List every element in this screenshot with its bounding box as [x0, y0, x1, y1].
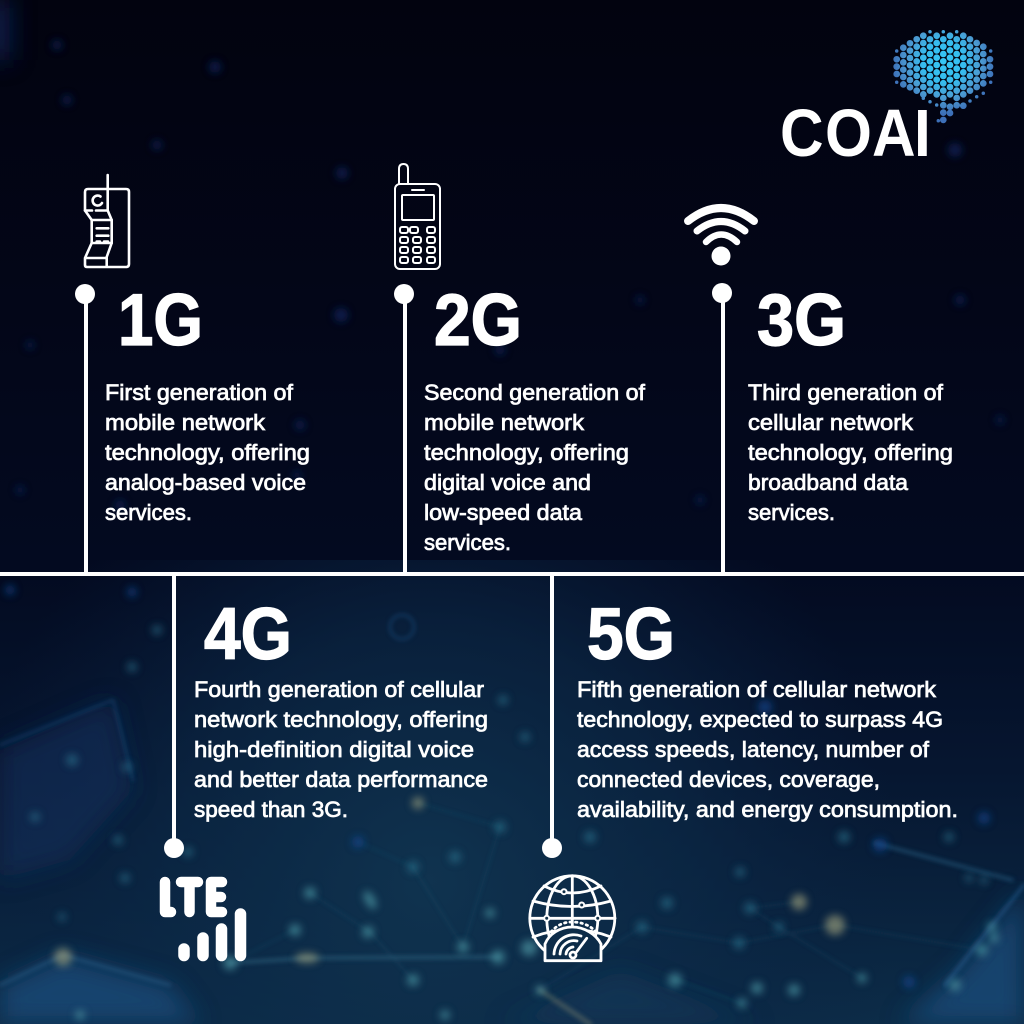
- text: 2G description: technology, offering: [424, 440, 629, 465]
- text: 5G description: [577, 677, 958, 822]
- text: 4G description: high-definition digital voice: [194, 737, 474, 762]
- text: 5G description: Fifth generation of cellular network: [577, 677, 937, 702]
- text: 5G description: connected devices, coverage,: [577, 767, 880, 792]
- heading 2G: 2G: [434, 280, 522, 361]
- heading 5G: 5G: [587, 594, 675, 675]
- logo wordmark: COAI: [780, 95, 931, 171]
- logo speech bubble of hexagon dots: [897, 32, 991, 121]
- text: 1G description: services.: [105, 500, 192, 525]
- text: 4G description: speed than 3G.: [194, 797, 348, 822]
- text: 2G description: Second generation of: [424, 380, 646, 405]
- text: 1G description: mobile network: [105, 410, 266, 435]
- panel: 2G: [395, 164, 646, 555]
- text: 3G description: [748, 380, 953, 525]
- icon: globe with speed gauge: [530, 876, 615, 961]
- panel: 3G: [688, 208, 953, 525]
- icon: LTE signal: [165, 882, 240, 956]
- icon: wifi: [688, 208, 754, 266]
- icon: brick phone: [85, 175, 129, 267]
- text: 4G description: and better data performance: [194, 767, 488, 792]
- heading 3G: 3G: [757, 280, 846, 361]
- text: 1G description: analog-based voice: [105, 470, 306, 495]
- text: 2G description: mobile network: [424, 410, 585, 435]
- panel: 4G: [165, 594, 488, 956]
- panel: 1G: [85, 175, 310, 525]
- text: 3G description: cellular network: [748, 410, 914, 435]
- heading 1G: 1G: [118, 280, 203, 361]
- text: 3G description: broadband data: [748, 470, 909, 495]
- text: 3G description: Third generation of: [748, 380, 944, 405]
- text: 2G description: low-speed data: [424, 500, 583, 525]
- text: 1G description: technology, offering: [105, 440, 310, 465]
- text: 5G description: access speeds, latency, number of: [577, 737, 930, 762]
- text: 4G description: [194, 677, 488, 822]
- text: 1G description: First generation of: [105, 380, 294, 405]
- logo: COAI: [780, 32, 991, 171]
- text: 2G description: digital voice and: [424, 470, 591, 495]
- text: 3G description: services.: [748, 500, 835, 525]
- text: 5G description: technology, expected to surpass 4G: [577, 707, 943, 732]
- icon: keypad phone: [395, 164, 440, 269]
- heading 4G: 4G: [204, 594, 292, 675]
- text: 3G description: technology, offering: [748, 440, 953, 465]
- text: 5G description: availability, and energy consumption.: [577, 797, 958, 822]
- text: 4G description: Fourth generation of cellular: [194, 677, 484, 702]
- text: 2G description: [424, 380, 646, 555]
- text: 1G description: [105, 380, 310, 525]
- text: 2G description: services.: [424, 530, 511, 555]
- text: 4G description: network technology, offering: [194, 707, 488, 732]
- panel: 5G: [530, 594, 958, 961]
- timeline: horizontal axis, stems and dots: [0, 283, 1024, 858]
